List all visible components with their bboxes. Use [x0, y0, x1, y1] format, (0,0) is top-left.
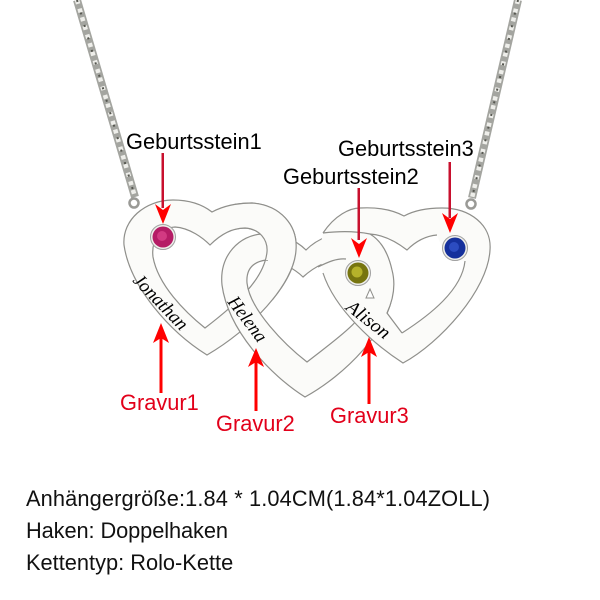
right clasp ring	[466, 200, 476, 208]
gemstone: ruby	[150, 224, 176, 250]
arrow: Gravur2	[248, 348, 264, 411]
specification: clasp: Haken: Doppelhaken	[26, 518, 228, 543]
label: Geburtsstein1: Geburtsstein1	[126, 129, 262, 154]
right necklace chain	[472, 0, 518, 198]
heart 1 overlap on heart 2	[235, 202, 297, 300]
engraving: Helena: Helena	[222, 292, 271, 347]
gemstone: yellow	[346, 260, 370, 286]
arrow: Gravur1	[153, 323, 169, 393]
arrow: Gravur3	[361, 337, 377, 404]
left necklace chain	[77, 0, 135, 197]
arrow: Geburtsstein1	[155, 153, 171, 224]
arrow: Geburtsstein2	[351, 188, 367, 258]
label: Gravur1: Gravur1	[120, 390, 199, 415]
heart 3 body	[321, 208, 490, 363]
left clasp ring	[130, 198, 138, 208]
engraving: Jonathan: Jonathan	[128, 270, 192, 335]
heart 2	[222, 233, 393, 397]
label: Geburtsstein2: Geburtsstein2	[283, 164, 419, 189]
engraving: Alison: Alison	[340, 295, 394, 344]
arrow: Geburtsstein3	[442, 162, 458, 233]
heart 3 outlines	[318, 208, 490, 363]
pendant: three interlocked hearts	[124, 200, 490, 397]
heart 1	[124, 200, 296, 355]
gemstone: blue	[442, 236, 468, 260]
label: Gravur2: Gravur2	[216, 411, 295, 436]
specification: chain type: Kettentyp: Rolo-Kette	[26, 550, 233, 575]
label: Gravur3: Gravur3	[330, 403, 409, 428]
specification: pendant size: Anhängergröße:1.84 * 1.04CM(1.84*1.04ZOLL)	[26, 486, 490, 511]
label: Geburtsstein3: Geburtsstein3	[338, 136, 474, 161]
